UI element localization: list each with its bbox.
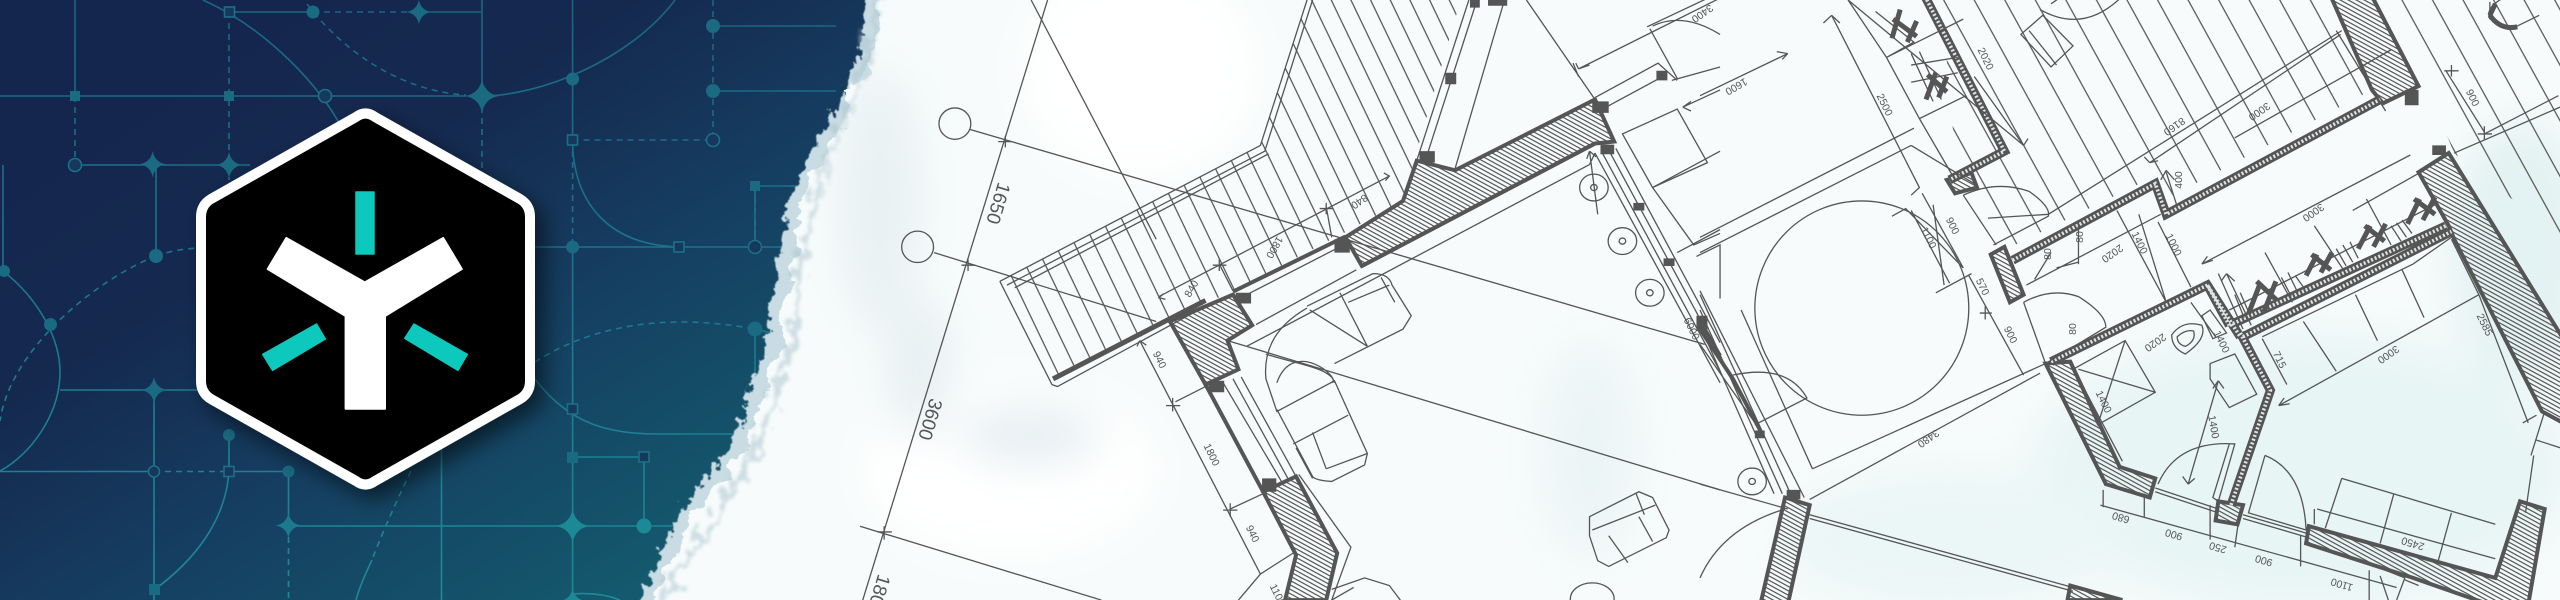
- dimension labels: 1650: [981, 180, 1014, 226]
- dimension labels: 3480: [1915, 427, 1941, 450]
- deck hatching: [1000, 0, 1461, 377]
- dimension lines: [1700, 0, 2558, 600]
- lower sofa: [1332, 578, 1400, 600]
- hexagon logo badge: [201, 114, 530, 484]
- bathroom fixtures: [2172, 310, 2257, 408]
- dimension labels: 2020: [2099, 242, 2125, 265]
- paper shading: [840, 0, 2560, 600]
- left column lines: [1700, 128, 2046, 509]
- wall: main diagonal: [1345, 100, 1614, 266]
- circuit nodes: [0, 0, 762, 600]
- sofa: [1266, 274, 1411, 481]
- wide hatched walls: [1760, 0, 2560, 600]
- dimension labels: 840: [1348, 191, 1370, 211]
- dimension labels: 3000: [2300, 201, 2326, 224]
- dimension labels: 3000: [2375, 343, 2401, 366]
- dimension labels: 1800: [1201, 442, 1222, 468]
- bottom double walls: [1810, 488, 2309, 591]
- dimension labels: 940: [1150, 349, 1168, 371]
- dimension labels: 400: [2173, 171, 2185, 189]
- dimension labels: 2500: [1874, 92, 1895, 118]
- dimension labels: 2020: [1975, 46, 1996, 72]
- dimension labels: 250: [2208, 539, 2228, 556]
- small lounge chair: [2021, 15, 2073, 67]
- hatched bearing walls: [1925, 0, 2451, 505]
- torn paper sheet: [640, 0, 2560, 600]
- paper edge streaks: [660, 0, 878, 600]
- dimension labels: 8160: [2161, 115, 2187, 138]
- dimension labels: 1000: [2163, 232, 2184, 258]
- dimension labels: 80: [2074, 231, 2086, 243]
- circuit pattern: [0, 0, 836, 600]
- dimension labels: 570: [1973, 276, 1991, 298]
- dimension labels: 680: [2111, 509, 2131, 526]
- dimension labels: 900: [2164, 526, 2184, 543]
- dimension labels: 940: [1243, 523, 1261, 545]
- wall: stair corner: [1170, 295, 1252, 385]
- interior thin lines: [1137, 165, 1590, 600]
- dimension labels: 2020: [2142, 331, 2168, 354]
- logo Y mark: [268, 238, 462, 409]
- axis bubbles: [902, 108, 1614, 600]
- dimension labels: 900: [2463, 87, 2481, 109]
- deck hatching: [1941, 0, 2372, 249]
- dimension labels: 3600: [913, 396, 946, 442]
- logo teal ticks: [263, 192, 467, 370]
- dimension labels: 1800: [1263, 234, 1285, 260]
- column of lines and pillars: [1580, 148, 1720, 383]
- tile grids: [2218, 199, 2495, 600]
- dimension labels: 1400: [2129, 230, 2150, 256]
- dimension labels: 1100: [1918, 225, 1939, 251]
- dimension labels: 900: [2254, 552, 2274, 569]
- dimension labels: 1400: [2211, 329, 2232, 355]
- door arcs: [1700, 0, 2306, 578]
- blueprint floor plan: left block: [860, 0, 1720, 600]
- dimension labels: 80: [2042, 248, 2054, 260]
- dimension labels: 715: [2270, 349, 2288, 371]
- armchair: [1590, 492, 1669, 566]
- axis lines: [860, 0, 1720, 600]
- dimension labels: 2450: [2400, 534, 2426, 552]
- dimension labels: 2585: [2474, 312, 2495, 338]
- dimension labels: 1600: [1723, 75, 1749, 97]
- deck outline: [1000, 0, 1595, 387]
- torn paper fuzzy edge: [626, 0, 930, 600]
- dimension labels: 3000: [2246, 100, 2272, 123]
- dimension labels: 3400: [1689, 2, 1715, 25]
- dimension labels: 1100: [2329, 575, 2354, 593]
- hexagon frame: [201, 114, 530, 484]
- radiator glyphs: [1848, 0, 2539, 318]
- large round table: [1755, 201, 1969, 415]
- dimension labels: 900: [1943, 215, 1961, 237]
- wall: lower corner: [1263, 476, 1337, 600]
- right furniture block: [1573, 0, 1720, 299]
- dimension labels: 840: [1182, 278, 1201, 299]
- dimension labels: 900: [2001, 324, 2019, 346]
- dimension labels: 1400: [2205, 414, 2221, 440]
- dimension labels: 80: [2067, 323, 2079, 335]
- dimension labels: 6000: [1681, 316, 1702, 342]
- dimension labels: [861, 2, 2495, 600]
- blueprint floor plan: right block: [1700, 0, 2560, 600]
- dimension labels: 1400: [2093, 389, 2114, 415]
